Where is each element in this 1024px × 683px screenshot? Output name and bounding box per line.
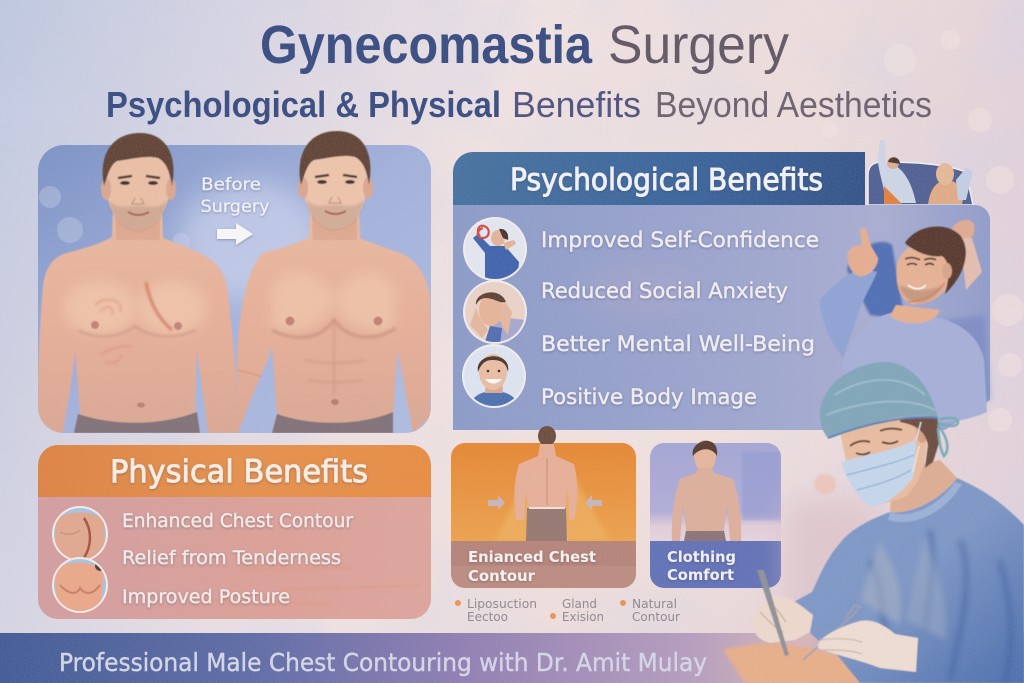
small figures tab: [868, 140, 973, 205]
panel: physical benefits: [38, 445, 431, 619]
label: enhanced chest contour: Contour: [468, 567, 535, 585]
face: [840, 417, 927, 505]
label: clothing comfort: [667, 548, 736, 584]
list: psychological benefits: Improved Self-Confidence: [541, 228, 819, 253]
label: clothing comfort: Comfort: [667, 566, 735, 584]
icon: chest contour: [52, 506, 108, 562]
figure: smiling man: [672, 440, 741, 541]
footer banner: [0, 633, 1024, 683]
list: technique bullets: Gland: [562, 597, 597, 611]
list: psychological benefits: [541, 228, 819, 410]
surgical gown: [790, 478, 1024, 683]
heading: physical benefits: Physical Benefits: [110, 454, 368, 490]
figure: happy patient in gown: [820, 220, 990, 423]
left hand with scalpel: [753, 570, 813, 656]
list: technique bullets: [455, 597, 680, 624]
list: technique bullets: Exision: [562, 610, 604, 624]
surgical cap: [820, 362, 938, 438]
label: clothing comfort: Clothing: [667, 548, 736, 566]
subtitle: Psychological & Physical: [106, 84, 501, 125]
list: physical benefits: Enhanced Chest Contour: [122, 510, 353, 532]
icon: social anxiety: [463, 280, 527, 345]
arrow: inward right: [585, 495, 602, 510]
heading: psychological benefits: Psychological Benefits: [510, 163, 823, 198]
panel: before and after photo: [38, 131, 431, 433]
footer banner: Professional Male Chest Contouring with Dr. Amit Mulay: [59, 648, 707, 677]
panel: psychological benefits: [453, 140, 990, 430]
list: psychological benefits: Positive Body Image: [541, 385, 757, 410]
neck: [890, 460, 957, 512]
title: Gynecomastia: [260, 15, 593, 75]
list: psychological benefits: Reduced Social Anxiety: [541, 279, 788, 304]
figure: surgeon: [723, 362, 1024, 683]
list: physical benefits: Improved Posture: [122, 586, 290, 608]
icon: tenderness relief: [52, 557, 108, 613]
list: technique bullets: Eectoo: [467, 610, 508, 624]
arrow: before to after: [217, 223, 253, 245]
arrow: inward left: [488, 495, 505, 510]
title: Surgery: [608, 15, 789, 75]
figure: man from behind: [514, 426, 577, 541]
subtitle: Beyond Aesthetics: [655, 84, 932, 125]
list: physical benefits: Relief from Tenderness: [122, 547, 341, 569]
list: technique bullets: Liposuction: [467, 597, 537, 611]
subtitle: [106, 84, 932, 125]
panel: clothing comfort: [650, 440, 781, 588]
title: [260, 15, 789, 75]
label: before surgery: Surgery: [200, 197, 270, 217]
icon: mental well-being: [462, 344, 526, 408]
label: enhanced chest contour: Enianced Chest: [468, 548, 597, 566]
figure: man before surgery: [38, 133, 238, 433]
heading: physical benefits: [38, 445, 431, 497]
figure: man after surgery: [237, 131, 430, 433]
list: psychological benefits: Better Mental Well-Being: [541, 332, 815, 357]
label: before surgery: [200, 175, 270, 217]
list: physical benefits: [122, 510, 353, 608]
list: technique bullets: Natural: [632, 597, 677, 611]
surgical mask: [841, 440, 916, 507]
panel: enhanced chest contour: [451, 426, 636, 588]
icon: self-confidence: [463, 217, 527, 285]
label: enhanced chest contour: [468, 548, 597, 585]
list: technique bullets: Contour: [632, 610, 680, 624]
subtitle: Benefits: [512, 84, 641, 125]
label: before surgery: Before: [201, 175, 261, 195]
right hand with forceps: [803, 605, 918, 672]
heading: psychological benefits: [453, 152, 865, 205]
